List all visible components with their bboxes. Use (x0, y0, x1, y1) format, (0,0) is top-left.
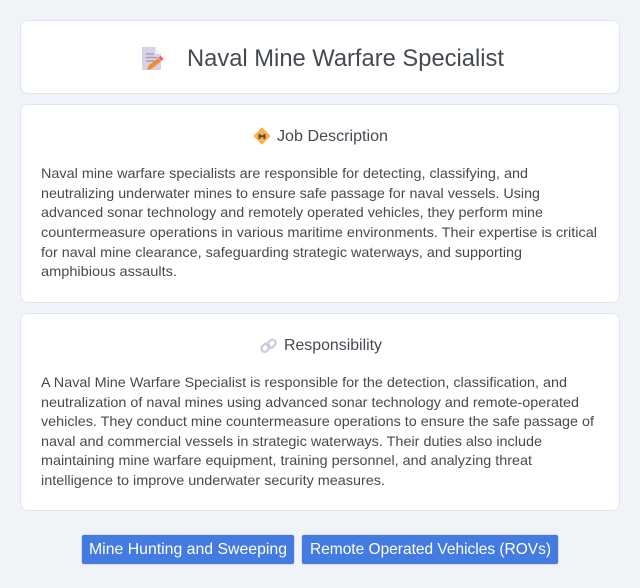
icon: job description diamond (254, 128, 270, 144)
heading: job description: Job Description (277, 128, 388, 145)
tag label: mine hunting and sweeping: Mine Hunting and Sweeping (89, 541, 287, 558)
text block: responsibility: neutralization of naval mines using advanced sonar technology and remote-operated (41, 394, 579, 410)
text block: job description (41, 165, 597, 279)
tag background: remote operated vehicles (301, 534, 559, 565)
tag background: mine hunting (81, 534, 295, 565)
text block: job description: for naval mine clearance, safeguarding strategic waterways, and supporting (41, 244, 522, 260)
text block: responsibility: A Naval Mine Warfare Specialist is responsible for the detection, classification, and (41, 374, 567, 390)
text block: job description: Naval mine warfare specialists are responsible for detecting, classifying, and (41, 165, 528, 181)
text block: job description: neutralizing underwater mines to ensure safe passage for naval vessels. Using (41, 185, 540, 201)
panel: title card (20, 20, 620, 94)
text block: responsibility: vehicles. They conduct mine countermeasure operations to ensure the safe passage of (41, 413, 594, 429)
text block: responsibility: naval and commercial vessels in strategic waterways. Their duties also include (41, 433, 542, 449)
text block: responsibility (41, 374, 594, 488)
tag label: remote operated vehicles: Remote Operated Vehicles (ROVs) (310, 541, 551, 558)
panel: responsibility card (20, 313, 620, 511)
heading: responsibility: Responsibility (284, 337, 382, 354)
text block: responsibility: maintaining mine warfare equipment, training personnel, and analyzing threat (41, 452, 532, 468)
text block: responsibility: intelligence to improve underwater security measures. (41, 472, 385, 488)
icon: chain link (260, 338, 277, 355)
icon: document with pencil (142, 47, 164, 70)
text block: job description: advanced sonar technology and remotely operated vehicles, they perform mine (41, 204, 543, 220)
text block: job description: countermeasure operations in various maritime environments. Their expertise is critical (41, 224, 597, 240)
panel: job description card (20, 104, 620, 303)
text block: job description: amphibious assaults. (41, 263, 177, 279)
title: Naval Mine Warfare Specialist (187, 45, 504, 72)
